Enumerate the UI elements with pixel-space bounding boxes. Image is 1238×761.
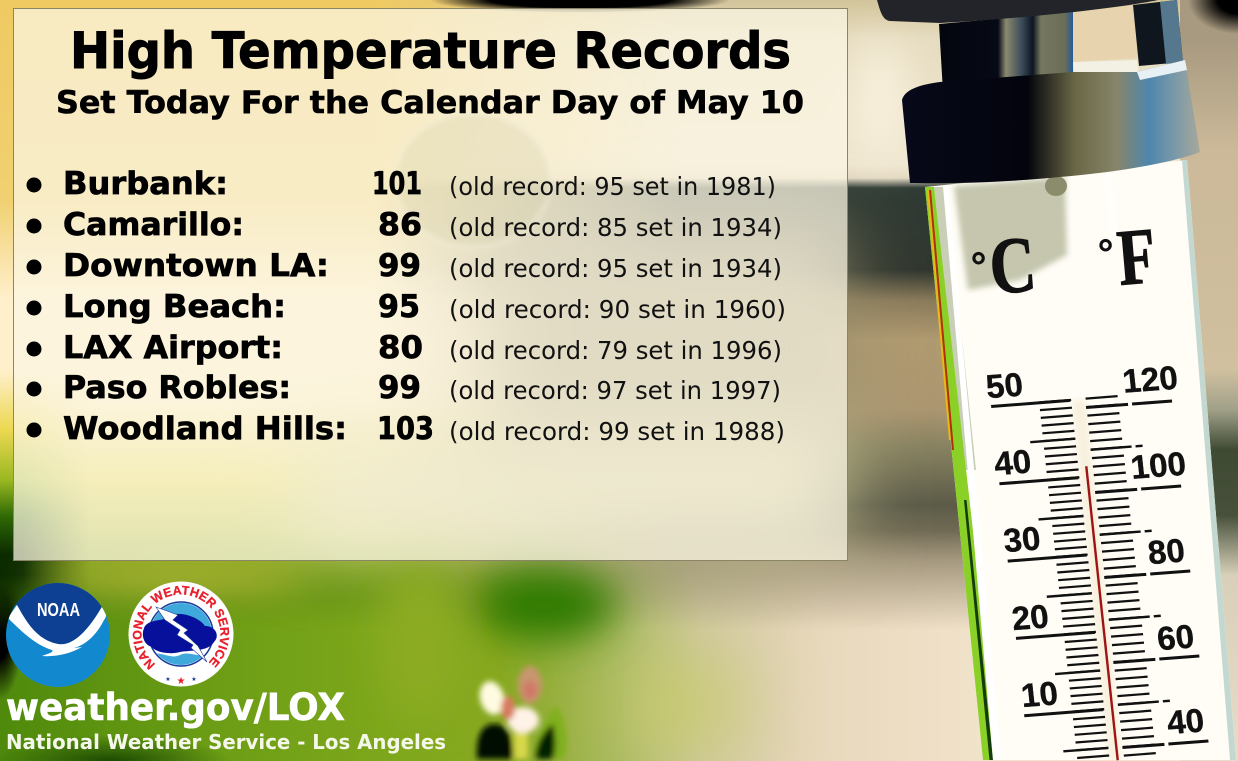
office name: National Weather Service - Los Angeles (6, 730, 446, 754)
icon: National Weather Service logo: ★ (165, 676, 171, 683)
record: Burbank: (old record: 95 set in 1981) (449, 172, 776, 201)
record: Burbank: 101 (372, 166, 422, 202)
fahrenheit numbers: 60 (1155, 619, 1196, 658)
record: Camarillo: Camarillo: (63, 207, 244, 243)
record: Woodland Hills: 103 (377, 411, 434, 447)
record: Burbank: Burbank: (63, 166, 228, 202)
record: Woodland Hills: Woodland Hills: (63, 411, 347, 447)
thermometer cap (877, 0, 1200, 183)
degree labels: C (986, 220, 1039, 312)
icon: NOAA logo: NOAA (37, 600, 80, 620)
record: LAX Airport: (old record: 79 set in 1996) (449, 336, 782, 365)
degree labels: ° (971, 245, 986, 287)
record: Woodland Hills: (old record: 99 set in 1988) (449, 417, 785, 446)
degree labels: ° (1098, 232, 1113, 274)
degree labels (971, 212, 1159, 312)
record: Paso Robles (26, 370, 781, 406)
record: LAX Airport: 80 (378, 330, 423, 366)
record: Camarillo: 86 (378, 207, 422, 243)
thermometer tube (925, 160, 1236, 760)
record: Long Beach: 95 (378, 289, 420, 325)
website: weather.gov/LOX (6, 686, 345, 729)
title: High Temperature Records (70, 22, 791, 80)
record: Camarillo: (old record: 85 set in 1934) (449, 213, 782, 242)
panel: records (14, 8, 848, 560)
fahrenheit ticks (1101, 392, 1190, 758)
record: Woodland Hills (26, 411, 785, 447)
fahrenheit numbers: 120 (1121, 360, 1180, 401)
fahrenheit numbers: 100 (1129, 446, 1188, 487)
record: Downtown LA: 99 (378, 248, 421, 284)
flower bud (476, 666, 566, 759)
celsius numbers: 50 (984, 367, 1025, 406)
record: Long Beach: (old record: 90 set in 1960) (449, 295, 786, 324)
record: Paso Robles: Paso Robles: (63, 370, 291, 406)
icon: National Weather Service logo: NATIONAL WEATHER SERVICE (132, 586, 230, 670)
record: LAX Airport (26, 330, 782, 366)
record: Camarillo (26, 207, 782, 243)
record: Downtown LA: (old record: 95 set in 1934) (449, 254, 782, 283)
celsius numbers (984, 366, 1060, 715)
record: Long Beach: Long Beach: (63, 289, 286, 325)
record: Burbank (26, 166, 776, 202)
record: Long Beach (26, 289, 786, 325)
fahrenheit numbers (1120, 360, 1216, 743)
celsius numbers: 40 (992, 444, 1033, 483)
degree labels: F (1114, 212, 1159, 303)
subtitle: Set Today For the Calendar Day of May 10 (56, 85, 804, 121)
icon: NOAA logo (6, 583, 110, 687)
celsius numbers: 20 (1010, 598, 1051, 638)
fahrenheit numbers: 80 (1146, 533, 1187, 572)
soft background blobs (30, 40, 908, 755)
record: LAX Airport: LAX Airport: (63, 330, 283, 366)
celsius numbers: 30 (1002, 520, 1042, 560)
faint lens circle (395, 113, 551, 247)
icon: National Weather Service logo: ★ (177, 676, 186, 687)
mercury column (1086, 466, 1118, 760)
icon: National Weather Service logo: ★ (191, 676, 197, 683)
record: Paso Robles: 99 (378, 370, 421, 406)
record: Paso Robles: (old record: 97 set in 1997) (449, 376, 781, 405)
record: Downtown LA: Downtown LA: (63, 248, 329, 284)
celsius numbers: 10 (1019, 675, 1060, 715)
record: Downtown LA (26, 248, 782, 284)
celsius ticks (1030, 400, 1093, 760)
thermometer (877, 0, 1236, 761)
fahrenheit numbers: 40 (1165, 702, 1206, 742)
thermometer scale (984, 355, 1218, 761)
